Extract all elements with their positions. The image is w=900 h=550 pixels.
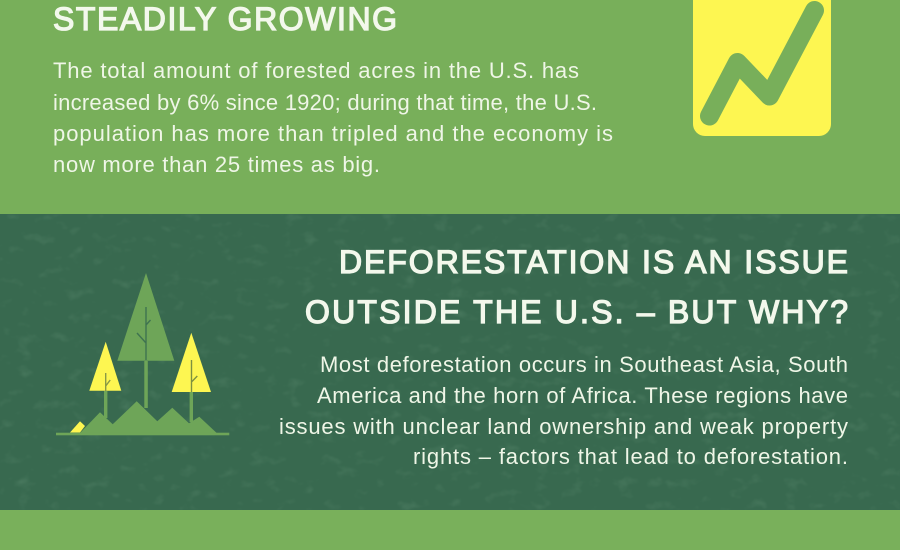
- text block: forested acres: population has more than tripled and the economy is: [53, 121, 613, 146]
- panel: deforestation: [0, 214, 900, 510]
- text block: forested acres: now more than 25 times as big.: [53, 152, 380, 177]
- text block: deforestation reasons: rights – factors that lead to deforestation.: [413, 444, 848, 469]
- icon: forest of three trees: [56, 273, 229, 435]
- heading: deforestation outside the U.S.: OUTSIDE THE U.S. – BUT WHY?: [305, 294, 848, 330]
- heading: deforestation outside the U.S.: DEFORESTATION IS AN ISSUE: [339, 244, 848, 280]
- text block: deforestation reasons: Most deforestation occurs in Southeast Asia, South: [320, 352, 848, 377]
- text block: deforestation reasons: [279, 352, 848, 469]
- panel: steadily growing: [0, 0, 900, 214]
- text block: deforestation reasons: America and the horn of Africa. These regions have: [317, 383, 848, 408]
- icon: rising line chart: [693, 0, 831, 136]
- text block: forested acres: The total amount of forested acres in the U.S. has: [53, 58, 579, 83]
- panel: bottom band: [0, 510, 900, 550]
- text block: forested acres: increased by 6% since 1920; during that time, the U.S.: [53, 90, 597, 115]
- heading: steadily growing: STEADILY GROWING: [53, 1, 397, 37]
- heading: deforestation outside the U.S.: [305, 244, 848, 330]
- text block: forested acres: [53, 58, 613, 177]
- text block: deforestation reasons: issues with unclear land ownership and weak property: [279, 414, 848, 439]
